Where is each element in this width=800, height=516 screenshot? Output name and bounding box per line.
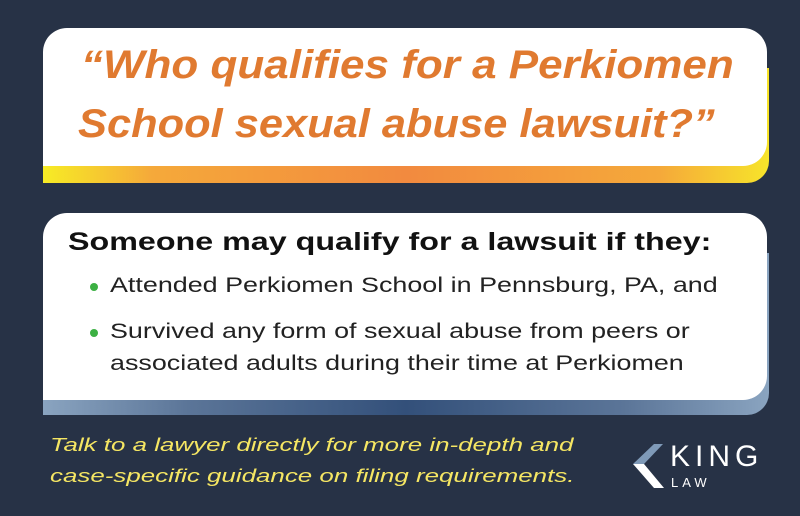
card content	[43, 213, 767, 400]
panel: qualification card	[43, 213, 769, 415]
heading: Someone may qualify for a lawsuit if they:	[68, 228, 711, 256]
footer text: case-specific guidance on filing requirements.	[50, 466, 574, 486]
title text: School sexual abuse lawsuit?”	[78, 102, 715, 146]
bullet 2: Survived any form of sexual abuse from peers or	[110, 320, 690, 343]
logo: King Law	[633, 440, 763, 490]
logo text: KING	[670, 440, 763, 473]
gradient band: title	[43, 68, 769, 183]
title text	[43, 28, 767, 166]
bullet 1: Attended Perkiomen School in Pennsburg, PA, and	[110, 274, 718, 297]
bullet 2: associated adults during their time at Perkiomen	[110, 352, 684, 375]
title text: “Who qualifies for a Perkiomen	[81, 43, 734, 87]
footer text: Talk to a lawyer directly for more in-depth and	[50, 435, 573, 455]
icon: chevron	[633, 444, 664, 488]
footer text	[50, 435, 574, 486]
bullet 2	[90, 320, 690, 375]
gradient band: qualification	[43, 253, 769, 415]
logo: King Law: LAW	[671, 475, 711, 490]
panel: title card	[43, 28, 769, 183]
